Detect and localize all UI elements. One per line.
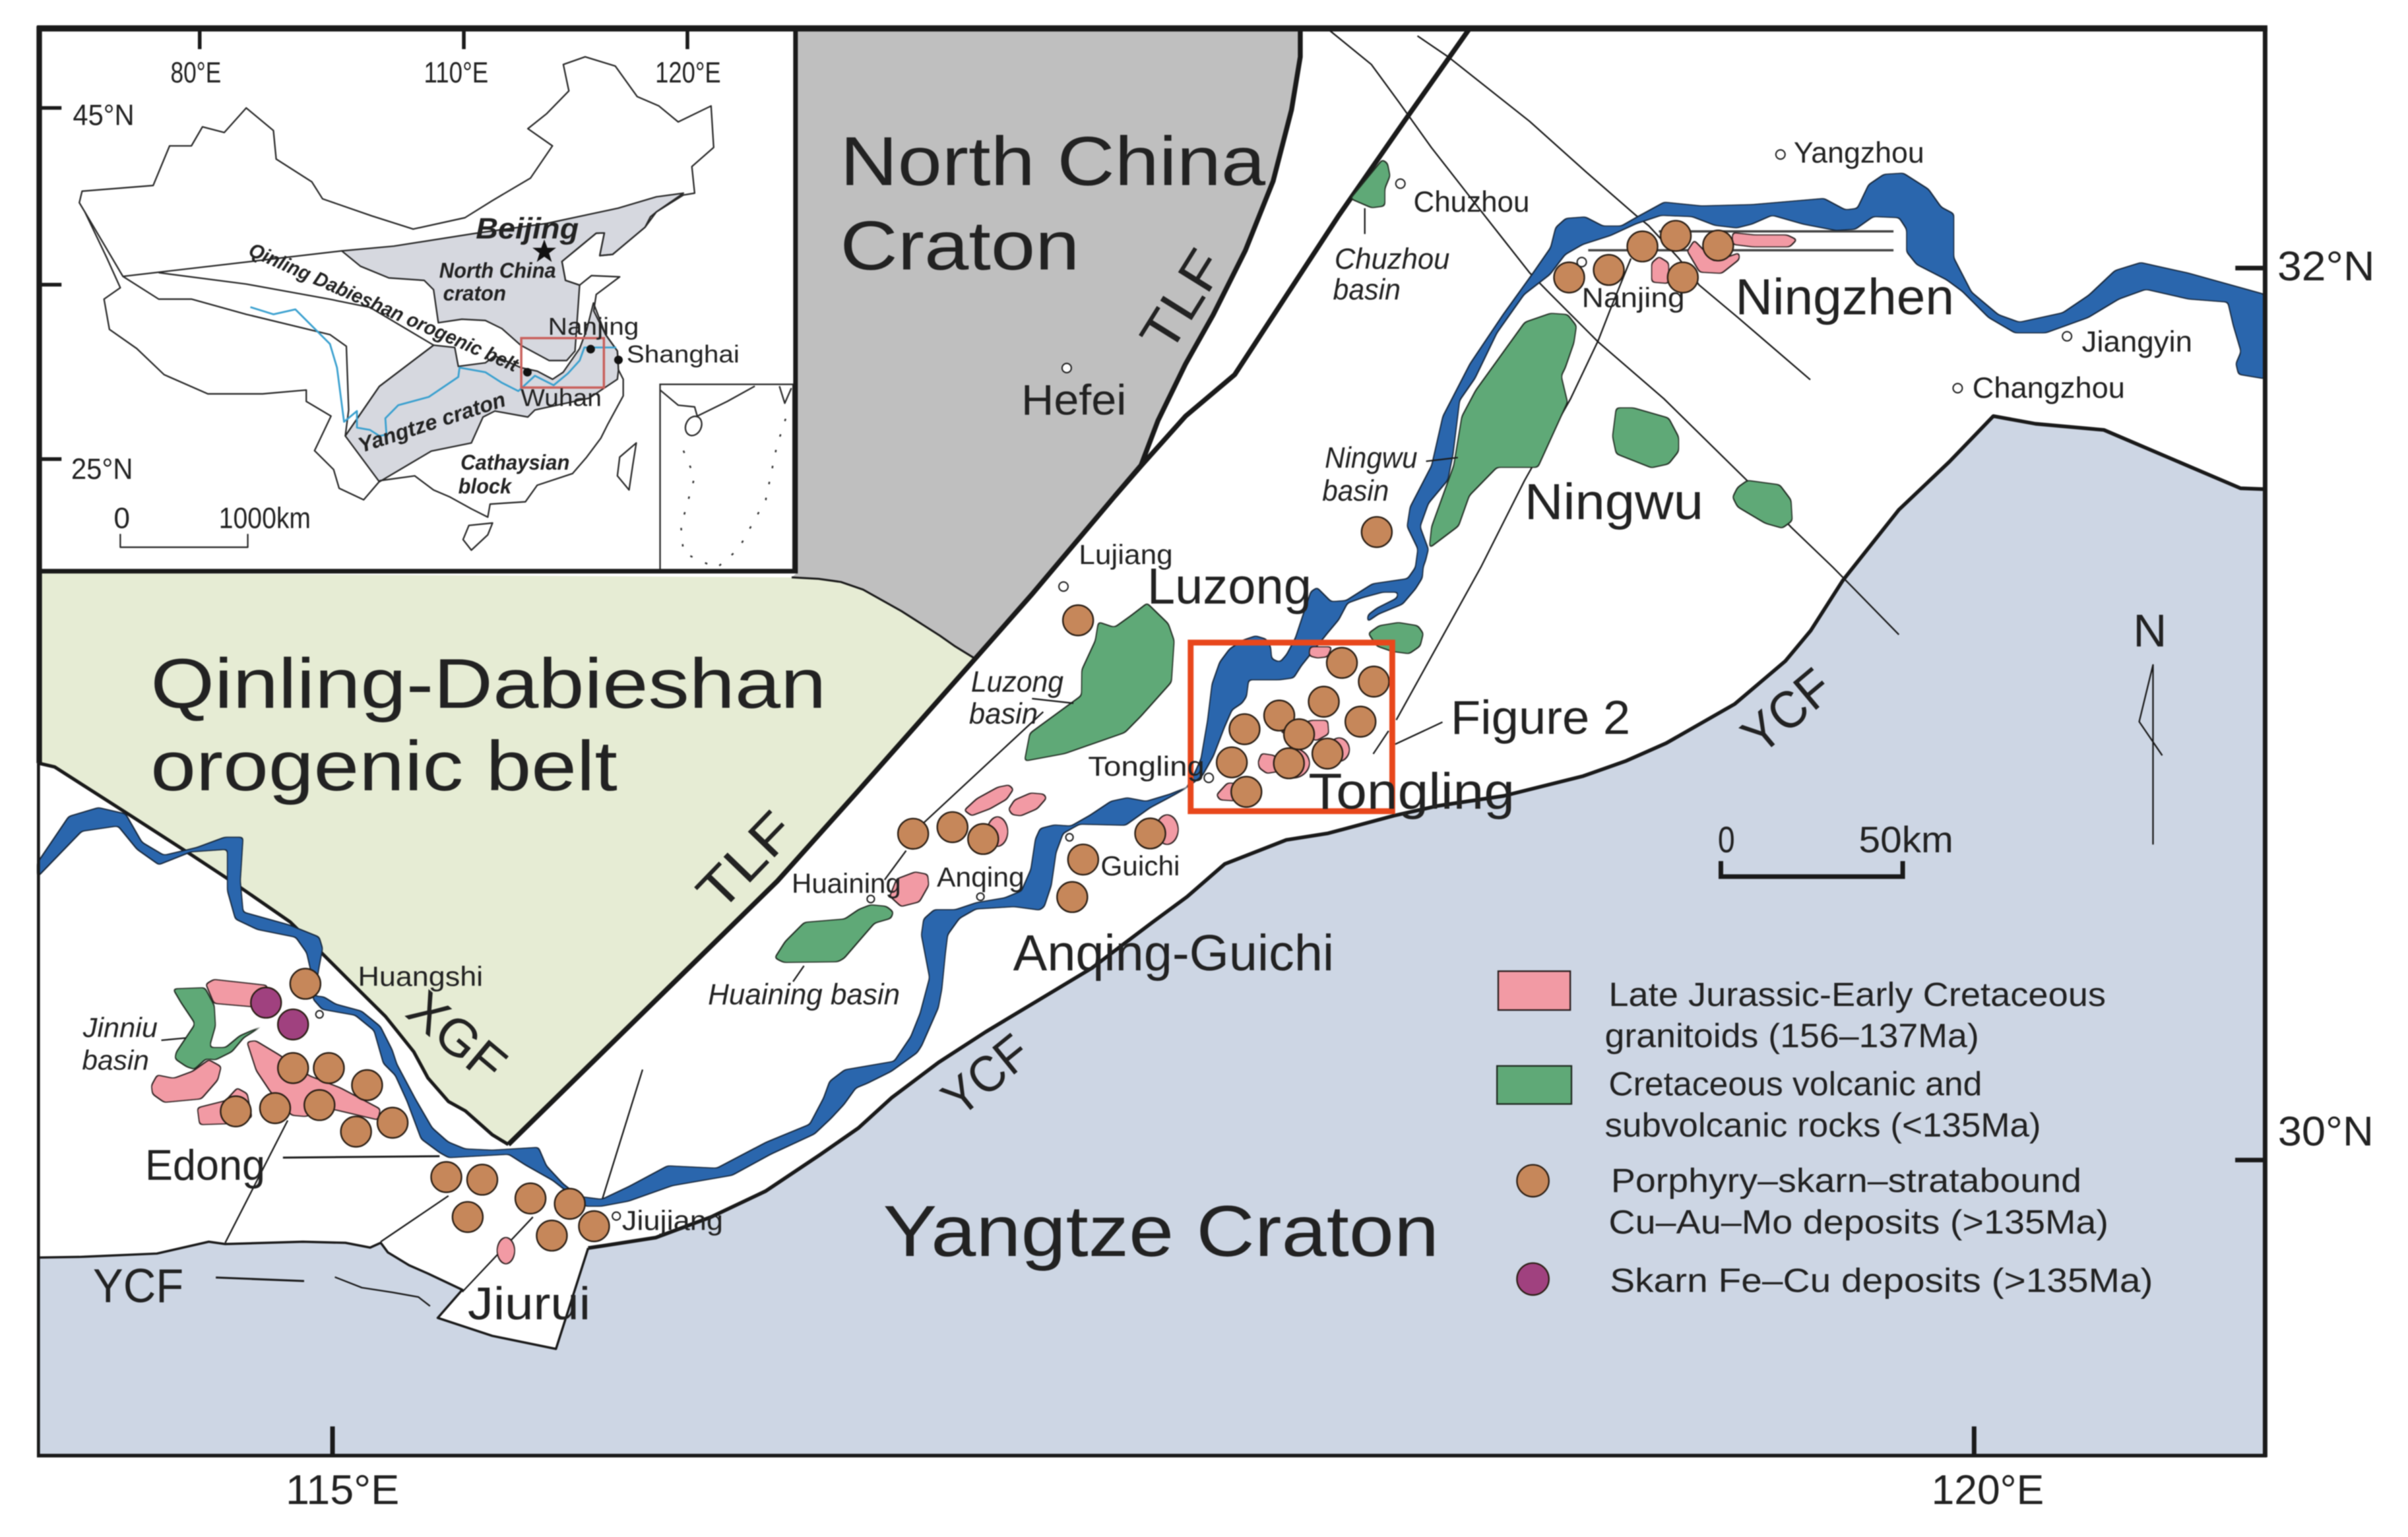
labels: cities: Changzhou: [1973, 372, 2125, 404]
labels: cities: [358, 137, 2192, 1236]
inset: labels: North China: [439, 259, 556, 282]
inset: labels: Beijing: [476, 213, 579, 245]
labels: basins: Jinniu: [82, 1012, 158, 1043]
inset: Yangtze river: [251, 307, 616, 436]
legend: Cu-Au-Mo deposits: Cu–Au–Mo deposits (>135Ma): [1608, 1203, 2108, 1241]
labels: cities: Jiujiang: [622, 1205, 723, 1236]
labels: ore districts: Edong: [145, 1141, 265, 1189]
skarn Fe-Cu deposits: [251, 988, 308, 1040]
labels: fault names: [93, 239, 1843, 1313]
labels: basins: Ningwu: [1325, 442, 1418, 474]
labels: cities: Nanjing: [1582, 282, 1685, 313]
inset: graticule labels: 45°N: [73, 99, 135, 131]
inset background: [38, 28, 796, 571]
inset: graticule labels: 80°E: [170, 57, 221, 89]
inset: graticule labels: 110°E: [424, 57, 488, 89]
labels: fault names: YCF: [1730, 657, 1843, 765]
graticule ticks and labels: 115°E: [286, 1467, 399, 1513]
inset: China outline: [79, 57, 714, 517]
labels: basins: [82, 243, 1449, 1075]
labels: ore districts: Anqing-Guichi: [1013, 925, 1334, 982]
labels: cities: Chuzhou: [1413, 186, 1529, 218]
volcanic basins (green): [172, 159, 1792, 1070]
granitoid bodies (pink): [151, 232, 1798, 1265]
minor faults: [216, 31, 1899, 1306]
inset: graticule labels: 120°E: [655, 57, 721, 89]
inset: South China Sea box: [660, 385, 793, 570]
porphyry-skarn Cu-Au-Mo deposits: [220, 220, 1733, 1251]
labels: cities: Yangzhou: [1794, 137, 1924, 170]
legend: volcanic rocks: Cretaceous volcanic and: [1608, 1065, 1982, 1103]
inset: labels: block: [459, 474, 513, 498]
labels: basins: Chuzhou: [1335, 243, 1449, 275]
icon: north arrow: [2133, 605, 2167, 844]
inset: labels: [245, 213, 740, 498]
icon: Beijing star: [532, 239, 556, 262]
labels: fault names: YCF: [931, 1023, 1041, 1127]
inset: study area box: [521, 338, 604, 388]
labels: basins: basin: [1322, 475, 1389, 507]
labels: ore districts: Ningzhen: [1735, 268, 1954, 325]
inset: scale bar: 0: [113, 503, 130, 535]
inset: graticule labels: 25°N: [71, 453, 133, 486]
inset: scale bar: 1000km: [219, 503, 311, 535]
labels: fault names: TLF: [1129, 239, 1236, 362]
inset: labels: Shanghai: [627, 340, 740, 367]
inset: labels: craton: [443, 281, 506, 305]
fault: TLF eastern strand: [509, 28, 1470, 1145]
scale bar: 50 km: [1718, 819, 1953, 877]
inset: Qinling-Dabieshan belt lines: [85, 212, 433, 436]
labels: tectonic units: [150, 123, 1439, 1272]
legend: [1497, 971, 2153, 1300]
labels: cities: Lujiang: [1079, 539, 1173, 570]
labels: cities: Hefei: [1021, 375, 1126, 423]
labels: tectonic units: Yangtze Craton: [883, 1191, 1439, 1272]
inset: city dots: [523, 345, 623, 377]
labels: tectonic units: North China: [840, 123, 1266, 200]
boundary: North China craton and orogenic belt: [792, 577, 975, 659]
labels: ore districts: Ningwu: [1525, 474, 1703, 530]
scale bar: 50 km: 0: [1718, 819, 1735, 860]
legend: Cu-Au-Mo deposits: [1517, 1162, 2108, 1241]
fault: YCF main line: [588, 416, 2265, 1248]
graticule ticks and labels: 30°N: [2278, 1108, 2374, 1154]
labels: cities: Huangshi: [358, 960, 483, 991]
graticule ticks and labels: 32°N: [2277, 243, 2375, 290]
legend: volcanic rocks: [1497, 1065, 2041, 1144]
inset: Taiwan and Hainan: [463, 443, 636, 550]
labels: tectonic units: Craton: [840, 208, 1079, 285]
labels: cities: Tongling: [1088, 751, 1205, 782]
labels: ore districts: Jiurui: [468, 1278, 590, 1329]
labels: cities: Huaining: [792, 867, 901, 898]
region: North China Craton: [792, 28, 1300, 659]
inset: labels: Yangtze craton: [355, 387, 509, 457]
city markers: [316, 150, 2072, 1220]
labels: cities: Anqing: [937, 862, 1025, 893]
panel: China location inset: [38, 28, 796, 571]
labels: fault names: YCF: [93, 1260, 183, 1313]
scale bar: 50 km: 50km: [1859, 819, 1953, 860]
inset: labels: Cathaysian: [460, 451, 569, 474]
inset: scale bar: [113, 503, 311, 548]
river: Yangtze: [37, 173, 2265, 1207]
fault: TLF western strand: [1115, 28, 1300, 496]
leader lines: [162, 208, 1458, 1040]
region: Qinling-Dabieshan orogenic belt: [38, 573, 975, 1145]
box: Figure 2 location: [1191, 643, 1392, 811]
labels: basins: basin: [1333, 274, 1401, 306]
fault: YCF western segment: [38, 1241, 588, 1349]
fault: XGF: [38, 763, 509, 1145]
inset: graticule labels: [71, 57, 721, 486]
legend: Fe-Cu deposits: Skarn Fe–Cu deposits (>135Ma): [1610, 1262, 2153, 1300]
labels: fault names: XGF: [396, 979, 518, 1094]
inset: border: [38, 28, 796, 571]
icon: north arrow: N: [2133, 605, 2167, 656]
inset: Yangtze craton fill: [345, 303, 618, 482]
labels: cities: Jiangyin: [2081, 326, 2192, 358]
labels: tectonic units: orogenic belt: [150, 726, 618, 805]
labels: ore districts: Figure 2: [1451, 692, 1630, 745]
labels: basins: Huaining basin: [708, 978, 900, 1011]
labels: basins: Luzong: [971, 666, 1063, 699]
legend: granitoids: [1498, 971, 2106, 1054]
legend: volcanic rocks: subvolcanic rocks (<135Ma): [1605, 1106, 2041, 1144]
legend: granitoids: Late Jurassic-Early Cretaceous: [1608, 976, 2106, 1013]
inset: labels: Nanjing: [548, 312, 639, 340]
region: Yangtze Craton: [38, 416, 2265, 1456]
graticule ticks and labels: 120°E: [1932, 1467, 2044, 1513]
inset: graticule ticks: [42, 28, 687, 459]
labels: cities: Guichi: [1100, 850, 1180, 881]
labels: tectonic units: Qinling-Dabieshan: [150, 644, 826, 723]
labels: ore districts: [145, 268, 1954, 1329]
labels: basins: basin: [82, 1044, 149, 1075]
labels: ore districts: Tongling: [1308, 763, 1515, 820]
inset: labels: Qinling Dabieshan orogenic belt: [245, 239, 523, 377]
inset: labels: Wuhan: [521, 383, 602, 411]
inset: North China craton fill: [342, 193, 683, 361]
legend: granitoids: granitoids (156–137Ma): [1605, 1017, 1979, 1054]
labels: fault names: TLF: [685, 800, 806, 922]
graticule ticks and labels: [286, 243, 2375, 1513]
labels: basins: basin: [969, 698, 1038, 730]
labels: ore districts: Luzong: [1147, 558, 1312, 615]
legend: Cu-Au-Mo deposits: Porphyry–skarn–stratabound: [1611, 1162, 2081, 1199]
